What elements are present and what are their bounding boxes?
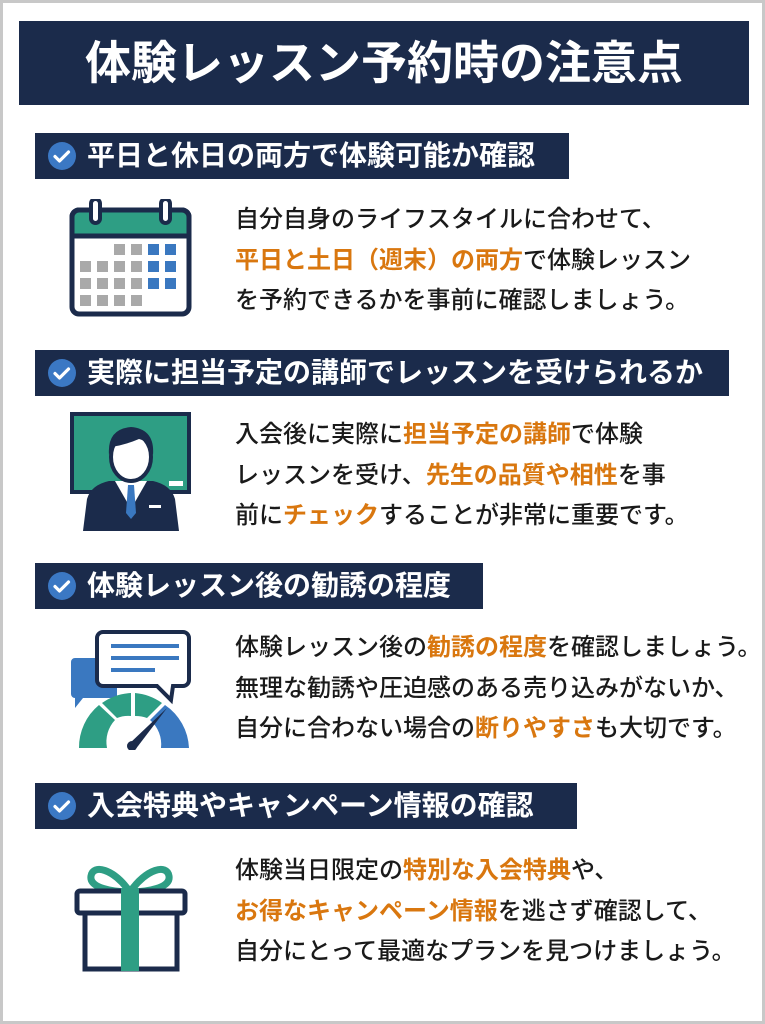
header: section 2 (35, 350, 729, 396)
text: section 3 (235, 634, 762, 742)
text: section 4 (235, 857, 736, 965)
header: section 3: 体験レッスン後の勧誘の程度 (87, 570, 451, 601)
header: section 4: 入会特典やキャンペーン情報の確認 (87, 790, 534, 821)
text: section 1: を予約できるかを事前に確認しましょう。 (235, 287, 689, 314)
header: section 1: 平日と休日の両方で体験可能か確認 (87, 140, 535, 171)
icon: chat gauge (71, 630, 191, 750)
icon: calendar (70, 199, 192, 316)
title: 体験レッスン予約時の注意点 (85, 37, 683, 89)
text: section 2: 入会後に実際に担当予定の講師で体験 (235, 421, 643, 448)
header: section 1 (35, 133, 569, 179)
text: section 3: 体験レッスン後の勧誘の程度を確認しましょう。 (235, 634, 762, 661)
header: section 3 (35, 563, 483, 609)
header: section 2: 実際に担当予定の講師でレッスンを受けられるか (87, 357, 703, 388)
text: section 2: レッスンを受け、先生の品質や相性を事 (235, 462, 666, 488)
text: section 1 (235, 206, 691, 314)
text: section 4: 体験当日限定の特別な入会特典や、 (235, 857, 618, 884)
title (19, 21, 749, 105)
text: section 2: 前にチェックすることが非常に重要です。 (235, 502, 689, 529)
icon: gift (74, 866, 188, 972)
text: section 3: 自分に合わない場合の断りやすさも大切です。 (235, 715, 737, 742)
header: section 4 (35, 783, 577, 829)
text: section 3: 無理な勧誘や圧迫感のある売り込みがないか、 (235, 674, 739, 702)
text: section 4: お得なキャンペーン情報を逃さず確認して、 (235, 898, 712, 924)
icon: teacher (70, 412, 191, 531)
text: section 2 (235, 421, 689, 529)
text: section 1: 自分自身のライフスタイルに合わせて、 (235, 206, 666, 233)
text: section 4: 自分にとって最適なプランを見つけましょう。 (235, 938, 736, 965)
text: section 1: 平日と土日（週末）の両方で体験レッスン (235, 246, 691, 274)
